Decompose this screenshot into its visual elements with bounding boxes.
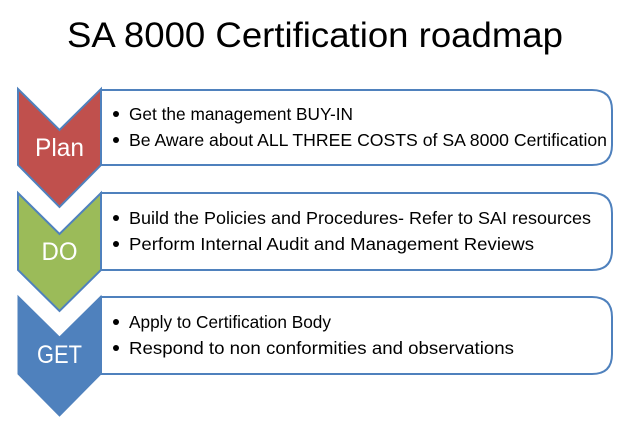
bullets: Plan: Get the management BUY-IN (129, 104, 353, 124)
panel: Plan (18, 89, 612, 207)
chevron: Plan (18, 89, 101, 207)
bullets: GET: Apply to Certification Body (129, 312, 331, 332)
bullets: Plan (113, 104, 607, 150)
text box: GET (101, 297, 612, 374)
bullets: GET: Respond to non conformities and observations (129, 338, 514, 358)
text box: Plan (101, 90, 612, 165)
bullets: DO: Perform Internal Audit and Management Reviews (129, 234, 534, 254)
panel: GET (18, 296, 612, 416)
title: SA 8000 Certification roadmap (67, 16, 563, 55)
label: Plan: Plan (35, 134, 84, 162)
bullets: GET (113, 312, 514, 358)
label: DO: DO (42, 238, 78, 266)
chevron: DO (18, 193, 101, 311)
panel: DO (18, 193, 612, 311)
bullets: DO (113, 208, 591, 254)
bullets: Plan: Be Aware about ALL THREE COSTS of SA 8000 Certification (129, 130, 607, 150)
label: GET: GET (37, 341, 82, 369)
text box: DO (101, 193, 612, 270)
bullets: DO: Build the Policies and Procedures- Refer to SAI resources (129, 208, 591, 228)
chevron: GET (18, 296, 101, 416)
